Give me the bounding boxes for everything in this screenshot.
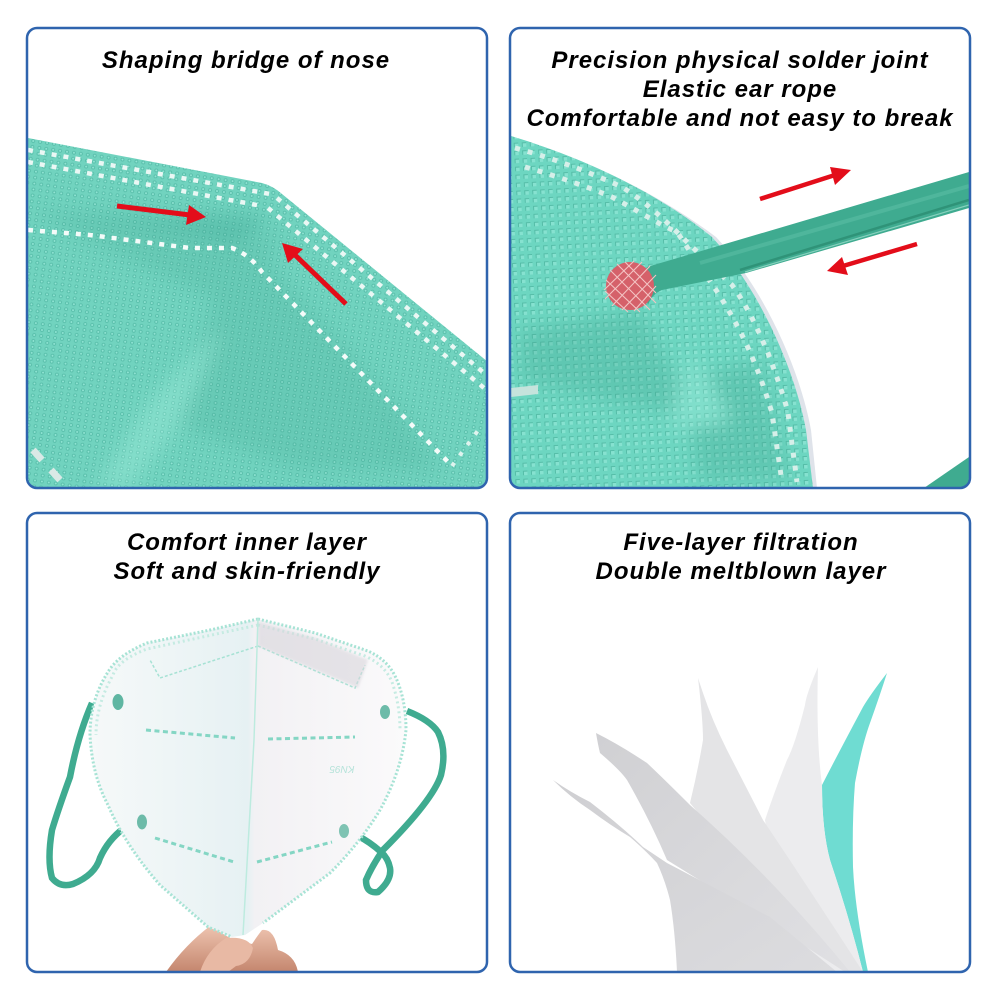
- heading: Soft and skin-friendly: [114, 558, 381, 585]
- second rope corner: [924, 457, 969, 488]
- heading: [596, 529, 887, 585]
- layer: teal: [822, 673, 887, 972]
- arrow: pointing left: [827, 244, 917, 275]
- arrow: points to bridge from left: [117, 205, 206, 225]
- heading: Comfort inner layer: [127, 529, 368, 556]
- heading: [114, 529, 381, 585]
- panel: precision solder joint: [510, 28, 970, 488]
- thumb: [200, 938, 253, 972]
- heading: Elastic ear rope: [643, 76, 837, 103]
- photo: five filter layers: [553, 667, 887, 972]
- layer: grey: [596, 733, 850, 972]
- solder mesh: [604, 261, 656, 312]
- heading: Shaping bridge of nose: [102, 47, 390, 74]
- panel: comfort inner layer: [27, 513, 487, 972]
- panel: five-layer filtration: [510, 513, 970, 972]
- heading: Double meltblown layer: [596, 558, 887, 585]
- photo: mask edge with ear rope: [511, 136, 969, 488]
- heading: [526, 47, 954, 132]
- KN95 mark: KN95: [329, 763, 355, 774]
- solder points: [112, 694, 124, 710]
- panel: shaping bridge of nose: [27, 28, 488, 488]
- ear strap: right: [358, 711, 443, 892]
- heading: Precision physical solder joint: [551, 47, 929, 74]
- arrow: points to bridge from lower right: [282, 243, 346, 304]
- layer: white outer: [765, 667, 863, 972]
- hand: [166, 926, 298, 972]
- ear strap: left: [50, 703, 124, 885]
- ear rope: [640, 172, 969, 305]
- stitching lines: [146, 730, 355, 862]
- heading: Comfortable and not easy to break: [526, 105, 954, 132]
- layer: grey front: [553, 780, 837, 972]
- arrow: pointing right: [760, 167, 851, 199]
- mask: inner side: [90, 619, 406, 937]
- heading: Five-layer filtration: [623, 529, 859, 556]
- photo: mask nose bridge close-up: [28, 138, 488, 488]
- layer: white middle: [690, 678, 776, 888]
